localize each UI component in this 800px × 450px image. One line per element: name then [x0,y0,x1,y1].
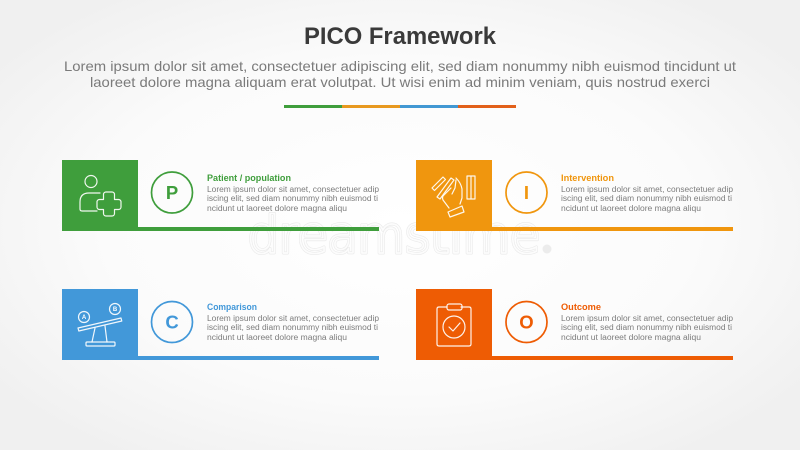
body text: outcome [561,314,734,342]
watermark: dreamstime [248,206,540,266]
body text: outcome: ncidunt ut laoreet dolore magna aliqu [561,333,701,342]
icon labels A and B: A [82,315,87,321]
icon: person with plus [80,176,121,216]
body text: comparison [207,314,380,342]
icon: clipboard with check [437,304,471,346]
icon: seesaw scale [78,304,122,346]
icon labels A and B [82,307,118,321]
body text: comparison: Lorem ipsum dolor sit amet, consectetuer adip [207,314,380,323]
panel: outcome [416,289,734,360]
panel: comparison [62,289,380,360]
body text: patient: iscing elit, sed diam nonummy nibh euismod ti [207,194,378,203]
body text: intervention [561,185,734,213]
watermark: dreamstime [248,206,540,266]
body text: comparison: iscing elit, sed diam nonummy nibh euismod ti [207,323,378,332]
body text: patient: Lorem ipsum dolor sit amet, consectetuer adip [207,185,380,194]
letter circle I [506,172,547,213]
letter circle C [152,302,192,342]
heading: intervention: Intervention [561,173,614,183]
icon labels A and B: B [113,307,118,313]
heading: comparison: Comparison [207,302,257,312]
body text: outcome: Lorem ipsum dolor sit amet, consectetuer adip [561,314,734,323]
intro text: laoreet dolore magna aliquam erat volutpat. Ut wisi enim ad minim veniam, quis nostrud exerci [90,74,710,90]
letter circle P: P [166,182,178,203]
body text: intervention: Lorem ipsum dolor sit amet, consectetuer adip [561,185,734,194]
letter circle O [506,302,547,342]
body text: comparison: ncidunt ut laoreet dolore magna aliqu [207,333,347,342]
intro text: Lorem ipsum dolor sit amet, consectetuer adipiscing elit, sed diam nonummy nibh euismod tincidunt ut [64,58,736,74]
panel: patient [62,160,380,231]
title: PICO Framework [304,23,497,50]
heading: outcome: Outcome [561,302,601,312]
title underline [284,105,516,108]
heading: patient: Patient / population [207,173,291,183]
letter circle P [152,172,192,213]
body text: intervention: ncidunt ut laoreet dolore magna aliqu [561,204,701,213]
intro text [64,58,736,90]
body text: outcome: iscing elit, sed diam nonummy nibh euismod ti [561,323,732,332]
icon: hand and bars [432,176,475,217]
body text: intervention: iscing elit, sed diam nonummy nibh euismod ti [561,194,732,203]
letter circle I: I [524,182,529,203]
body text: patient: ncidunt ut laoreet dolore magna aliqu [207,204,347,213]
letter circle C: C [165,312,179,332]
body text: patient [207,185,380,213]
letter circle O: O [519,312,534,332]
panel: intervention [416,160,734,231]
